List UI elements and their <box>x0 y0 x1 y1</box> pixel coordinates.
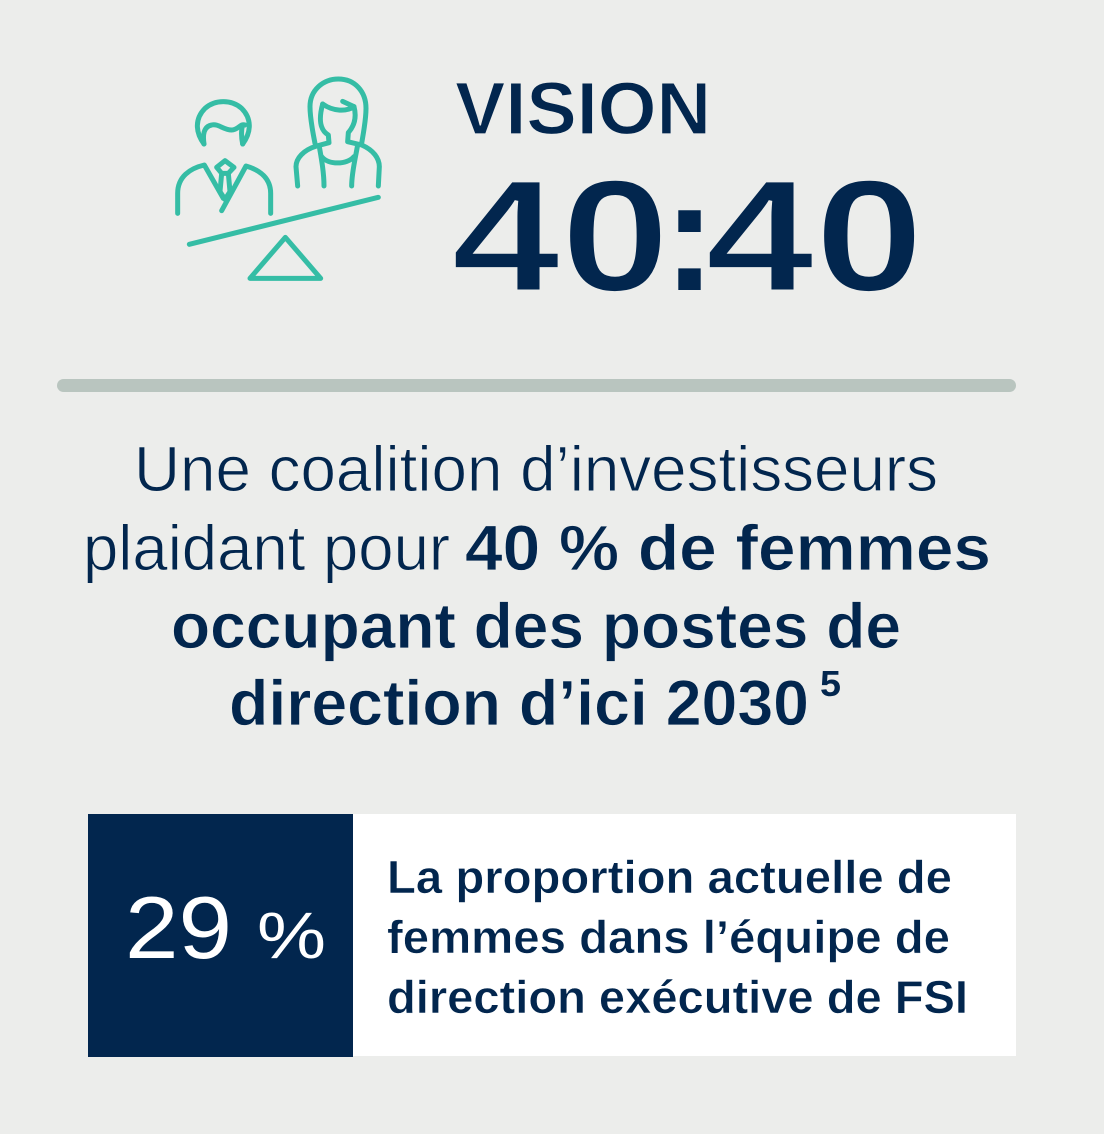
stat: 29 %: % <box>257 898 326 972</box>
heading: 40:40 <box>451 146 924 325</box>
text block: current proportion: femmes dans l’équipe de <box>387 911 950 963</box>
heading: 40:40: 40 <box>451 146 670 325</box>
text block: coalition description: 40 % de femmes <box>465 512 991 584</box>
heading: 40:40: : <box>663 148 716 324</box>
heading: VISION: VISION <box>455 67 711 150</box>
text block: coalition description <box>83 433 991 739</box>
text block: coalition description: occupant des postes de <box>171 590 901 662</box>
text block: coalition description: 5 <box>820 663 841 704</box>
divider <box>57 379 1016 392</box>
text block: coalition description: direction d’ici 2030 <box>229 667 809 739</box>
callout panel: navy stat box <box>88 814 353 1057</box>
callout panel: white background <box>353 814 1016 1056</box>
icon: man and woman balanced on a scale <box>178 79 379 278</box>
stat: 29 %: 29 <box>125 878 232 977</box>
text block: current proportion: direction exécutive de FSI <box>387 971 968 1023</box>
text block: coalition description: Une coalition d’investisseurs <box>134 433 938 505</box>
heading: 40:40: 40 <box>705 146 924 325</box>
stat: 29 % <box>125 878 326 977</box>
text block: current proportion: La proportion actuelle de <box>387 851 952 903</box>
text block: current proportion <box>387 851 968 1023</box>
text block: coalition description: plaidant pour <box>83 512 450 584</box>
